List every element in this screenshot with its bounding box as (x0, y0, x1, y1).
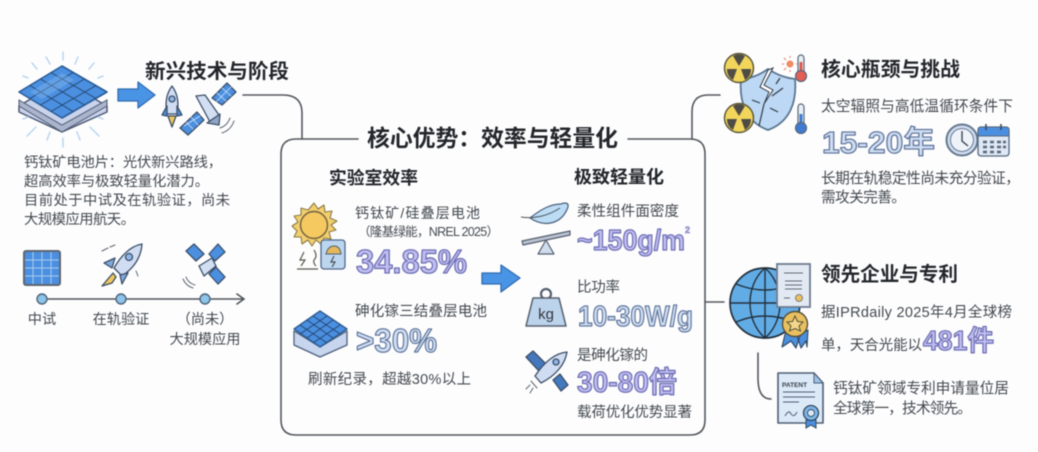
icon: patent document (778, 373, 823, 428)
text: specific power: 比功率 (577, 279, 620, 296)
value: 10-30W/g: 10-30W/g (578, 301, 693, 333)
icon: clock (946, 124, 978, 156)
timeline labels: 在轨验证 (93, 312, 149, 328)
text: compared to GaAs: 是砷化镓的 (577, 347, 648, 364)
panel: emerging technology (19, 52, 289, 228)
connector: core panel to leading companies (705, 301, 724, 303)
icon: satellite (180, 83, 236, 135)
heading: extreme lightweight: 极致轻量化 (574, 167, 664, 187)
text: perovskite silicon tandem: 钙钛矿/硅叠层电池 (355, 205, 480, 221)
value: 481 patents: 481件 (923, 325, 994, 356)
panel frame (281, 139, 705, 435)
icon: solar module (24, 251, 60, 285)
icon: sun and weather (292, 203, 345, 269)
connector: emerging tech to core panel (243, 95, 302, 139)
text: IPRdaily ranking: 据IPRdaily 2025年4月全球榜 (821, 303, 1012, 321)
text: perovskite description: 超高效率与极致轻量化潜力。 (24, 173, 209, 190)
text: areal density: 柔性组件面密度 (577, 203, 679, 220)
heading: emerging tech and stage: 新兴技术与阶段 (145, 59, 289, 83)
heading: bottleneck: 核心瓶颈与挑战 (821, 57, 960, 81)
timeline axis (42, 294, 244, 304)
text: perovskite description: 大规模应用航天。 (24, 210, 135, 228)
panel: core bottleneck and challenges (724, 54, 1020, 206)
icon: kg weight: kg (538, 306, 554, 323)
connector: core panel to bottleneck (692, 95, 720, 139)
icon: satellite rocket (526, 351, 568, 393)
heading: leading companies: 领先企业与专利 (821, 262, 958, 286)
value: 15-20 years: 15-20年 (822, 125, 935, 160)
value: >30%: >30% (356, 322, 437, 359)
icon: rocket (162, 86, 182, 127)
text: patent leadership (833, 380, 1009, 417)
value: 34.85%: 34.85% (356, 243, 467, 280)
text: long-term stability: 长期在轨稳定性尚未充分验证， (821, 170, 1020, 187)
timeline labels: 中试 (28, 312, 56, 328)
text: patent leadership: 全球第一，技术领先。 (833, 399, 972, 417)
text: triple junction: 砷化镓三结叠层电池 (355, 303, 487, 320)
text: source: （隆基绿能，NREL 2025） (358, 224, 499, 239)
timeline labels (28, 312, 240, 348)
text: payload advantage: 载荷优化优势显著 (577, 404, 692, 421)
icon: calendar (978, 124, 1009, 156)
icon: patent document: PATENT (782, 382, 807, 389)
text: long-term stability (821, 170, 1020, 206)
icon: cracked shield with radiation and thermometers (724, 54, 806, 134)
text: patent leadership: 钙钛矿领域专利申请量位居 (833, 380, 1009, 397)
text: perovskite description (24, 154, 230, 228)
panel: timeline (24, 244, 244, 348)
icon: kg weight (526, 289, 566, 326)
timeline nodes (37, 294, 210, 304)
arrow: efficiency to lightweight (482, 265, 520, 292)
heading: core advantages: 核心优势：效率与轻量化 (367, 125, 618, 151)
text: long-term stability: 需攻关完善。 (821, 189, 906, 206)
value: 30-80 times: 30-80倍 (577, 366, 677, 399)
icon: gallium arsenide cell (294, 311, 347, 357)
connector: patent note (758, 353, 771, 399)
text: record: 刷新纪录，超越30%以上 (308, 371, 471, 388)
heading: lab efficiency: 实验室效率 (329, 168, 418, 188)
panel: core advantages (281, 125, 705, 435)
text: Trina Solar: 单，天合光能以 (821, 337, 922, 354)
timeline labels: 大规模应用 (170, 331, 240, 348)
icon: globe with certificate and medal (730, 264, 810, 348)
value: ~150g/m²: 2 (685, 225, 690, 235)
text: perovskite description: 目前处于中试及在轨验证，尚未 (24, 192, 230, 209)
value: ~150g/m²: ~150g/m (577, 225, 685, 257)
timeline labels: （尚未） (177, 312, 233, 328)
icon: rocket launch (102, 244, 142, 286)
icon: satellite in orbit (183, 244, 225, 288)
panel: leading companies and patents (730, 262, 1012, 428)
arrow: to emerging tech (118, 82, 155, 108)
text: perovskite description: 钙钛矿电池片：光伏新兴路线， (24, 154, 222, 171)
icon: perovskite solar cell (19, 52, 107, 147)
text: conditions: 太空辐照与高低温循环条件下 (821, 98, 1013, 115)
icon: feather on balance (521, 203, 570, 254)
